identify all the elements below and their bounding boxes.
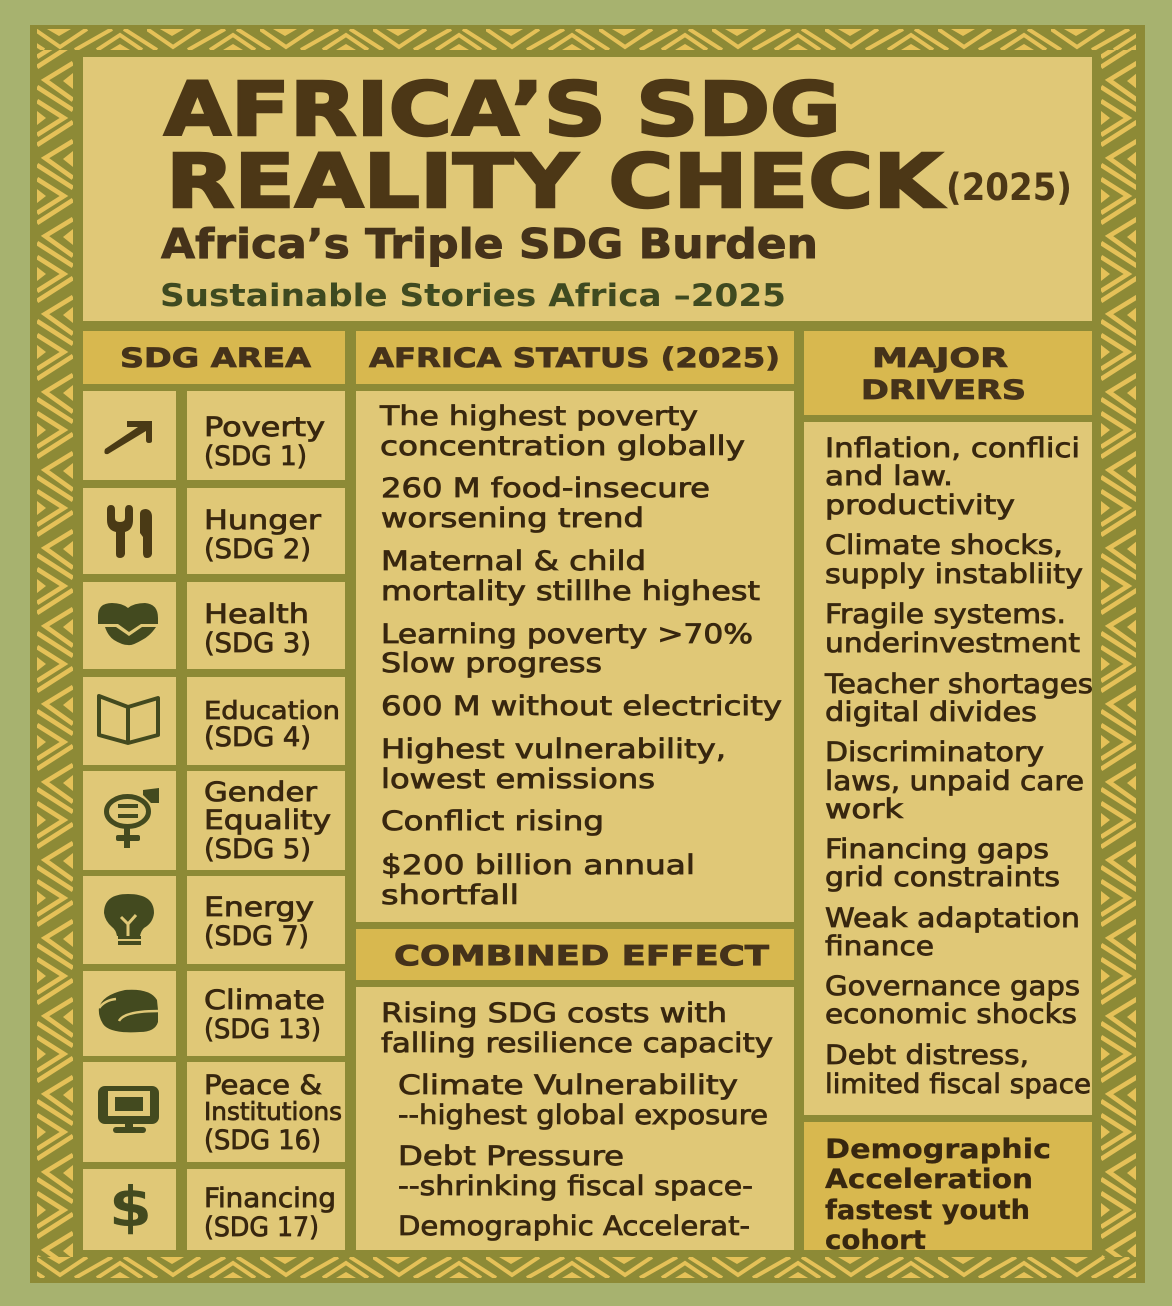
status: financing: $200 billion annual [381, 850, 695, 881]
status: poverty: The highest poverty [379, 401, 698, 432]
heading: Africa status [356, 331, 794, 384]
effect: debt pressure [398, 1141, 753, 1202]
panel: SDG area column [83, 331, 345, 1250]
driver: energy [825, 834, 1060, 893]
status: health [381, 546, 760, 607]
row: education [83, 677, 345, 765]
label: health: (SDG 3) [204, 628, 311, 659]
driver: climate [825, 903, 1080, 962]
driver: education: digital divides [825, 697, 1037, 728]
driver: energy: grid constraints [825, 862, 1060, 893]
icon: rising arrow [104, 421, 152, 454]
status: financing [381, 850, 695, 911]
driver: hunger: Climate shocks, [825, 530, 1063, 561]
label: climate [204, 985, 325, 1045]
effect summary: Rising SDG costs with [381, 998, 727, 1029]
effect: demographic acceleration: Demographic Accelerat- [398, 1211, 750, 1242]
driver: peace: Governance gaps [825, 971, 1080, 1002]
status: hunger [381, 473, 710, 534]
label: health [204, 599, 311, 659]
icon: heart with pulse [98, 603, 158, 645]
status: climate: Highest vulnerability, [381, 734, 726, 765]
status: climate [381, 734, 726, 795]
label: financing: Financing [204, 1183, 336, 1214]
label: education: Education [204, 696, 340, 725]
driver: health: underinvestment [825, 628, 1080, 659]
driver: gender: work [825, 794, 903, 825]
panel: title block [83, 57, 1092, 321]
effect summary [381, 998, 773, 1059]
label: poverty: (SDG 1) [204, 441, 307, 472]
icon: light bulb [104, 894, 154, 945]
driver: hunger: supply instabliity [825, 559, 1083, 590]
driver: peace [825, 971, 1080, 1030]
status: health: mortality stillhe highest [381, 576, 760, 607]
status: education [381, 619, 753, 679]
row: health [83, 582, 345, 669]
effect: debt pressure: --shrinking fiscal space- [398, 1171, 753, 1202]
effect: climate vulnerability: Climate Vulnerability [398, 1070, 738, 1101]
icon: climate cloud [99, 990, 159, 1032]
heading: major drivers: MAJOR [872, 343, 1008, 374]
status: education: Learning poverty >70% [381, 619, 753, 650]
heading: SDG area: SDG AREA [120, 343, 311, 374]
label: hunger [204, 505, 322, 565]
status: energy: 600 M without electricity [381, 691, 782, 722]
icon: open book [99, 696, 158, 743]
heading: Africa status: AFRICA STATUS (2025) [369, 343, 780, 374]
title year: (2025) [946, 166, 1072, 209]
driver: financing: limited fiscal space [825, 1069, 1091, 1100]
icon: gender equality symbol [106, 788, 159, 848]
label: gender equality: Equality [204, 805, 331, 836]
label: education: (SDG 4) [204, 722, 311, 753]
label: climate: (SDG 13) [204, 1014, 321, 1045]
label: poverty [204, 412, 325, 472]
driver: poverty: and law. [825, 461, 953, 492]
heading: major drivers [804, 331, 1092, 415]
row: poverty [83, 391, 345, 480]
status: education: Slow progress [381, 648, 602, 679]
heading: combined effect [356, 929, 794, 980]
label: hunger: (SDG 2) [204, 534, 311, 565]
label: education [204, 696, 340, 753]
panel: combined effect [356, 929, 794, 1250]
heading: combined effect: COMBINED EFFECT [394, 939, 769, 972]
panel: Africa status column [356, 331, 794, 922]
status: climate: lowest emissions [381, 764, 655, 795]
label: peace and institutions: Institutions [204, 1097, 342, 1126]
callout: demographic acceleration: Acceleration [825, 1164, 1033, 1195]
byline: Sustainable Stories Africa –2025 [160, 278, 786, 314]
title line 2: REALITY CHECK [166, 139, 945, 225]
label: gender equality [204, 777, 331, 865]
row: financing [83, 1169, 345, 1250]
label: energy: (SDG 7) [204, 921, 309, 952]
subtitle: Africa’s Triple SDG Burden [161, 220, 818, 268]
status: poverty [379, 401, 745, 462]
label: peace and institutions: (SDG 16) [204, 1125, 321, 1156]
driver: climate: finance [825, 931, 934, 962]
status: hunger: worsening trend [381, 503, 644, 534]
driver: poverty: Inflation, conflici [825, 433, 1080, 464]
callout: demographic acceleration [804, 1122, 1092, 1256]
row: energy [83, 876, 345, 964]
label: peace and institutions: Peace & [204, 1070, 322, 1101]
driver: financing [825, 1040, 1091, 1100]
status: conflict: Conflict rising [381, 806, 604, 837]
driver: gender: laws, unpaid care [825, 766, 1084, 797]
status: financing: shortfall [381, 880, 519, 911]
label: gender equality: (SDG 5) [204, 834, 311, 865]
label: financing: (SDG 17) [204, 1212, 319, 1243]
effect summary: falling resilience capacity [381, 1028, 773, 1059]
driver: peace: economic shocks [825, 999, 1077, 1030]
driver: education [824, 669, 1093, 728]
label: financing [204, 1183, 336, 1243]
row: hunger [83, 488, 345, 574]
status: health: Maternal & child [381, 546, 646, 577]
effect: debt pressure: Debt Pressure [398, 1141, 624, 1172]
driver: education: Teacher shortages [824, 669, 1093, 700]
title line 1: AFRICA’S SDG [164, 67, 841, 153]
driver: health [825, 599, 1080, 659]
status: hunger: 260 M food-insecure [381, 473, 710, 504]
label: gender equality: Gender [204, 777, 318, 808]
panel: major drivers column [804, 331, 1093, 1115]
row: gender equality [83, 771, 345, 870]
heading: SDG area [83, 331, 345, 384]
effect: climate vulnerability: --highest global exposure [398, 1100, 768, 1131]
callout: demographic acceleration: fastest youth [825, 1195, 1030, 1226]
driver: financing: Debt distress, [825, 1040, 1029, 1071]
icon: fork and knife [107, 505, 152, 558]
driver: poverty: productivity [825, 490, 1015, 521]
label: health: Health [204, 599, 309, 630]
status: poverty: concentration globally [380, 431, 745, 462]
label: climate: Climate [204, 985, 325, 1016]
driver: energy: Financing gaps [825, 834, 1049, 865]
callout: demographic acceleration: cohort [825, 1225, 926, 1256]
effect: climate vulnerability [398, 1070, 768, 1131]
driver: climate: Weak adaptation [825, 903, 1080, 934]
label: hunger: Hunger [204, 505, 322, 536]
icon: dollar sign: $ [109, 1175, 152, 1239]
row: climate [83, 971, 345, 1056]
heading: major drivers: DRIVERS [861, 375, 1026, 406]
driver: gender: Discriminatory [825, 737, 1044, 768]
row: peace and institutions [83, 1062, 345, 1162]
icon: monitor [98, 1086, 159, 1133]
label: poverty: Poverty [204, 412, 325, 443]
label: peace and institutions [204, 1070, 342, 1156]
driver: poverty [825, 433, 1080, 521]
label: energy [204, 892, 314, 952]
callout: demographic acceleration: Demographic [825, 1134, 1051, 1165]
label: energy: Energy [204, 892, 314, 923]
driver: health: Fragile systems. [825, 599, 1066, 630]
driver: hunger [825, 530, 1083, 590]
driver: gender [825, 737, 1084, 825]
